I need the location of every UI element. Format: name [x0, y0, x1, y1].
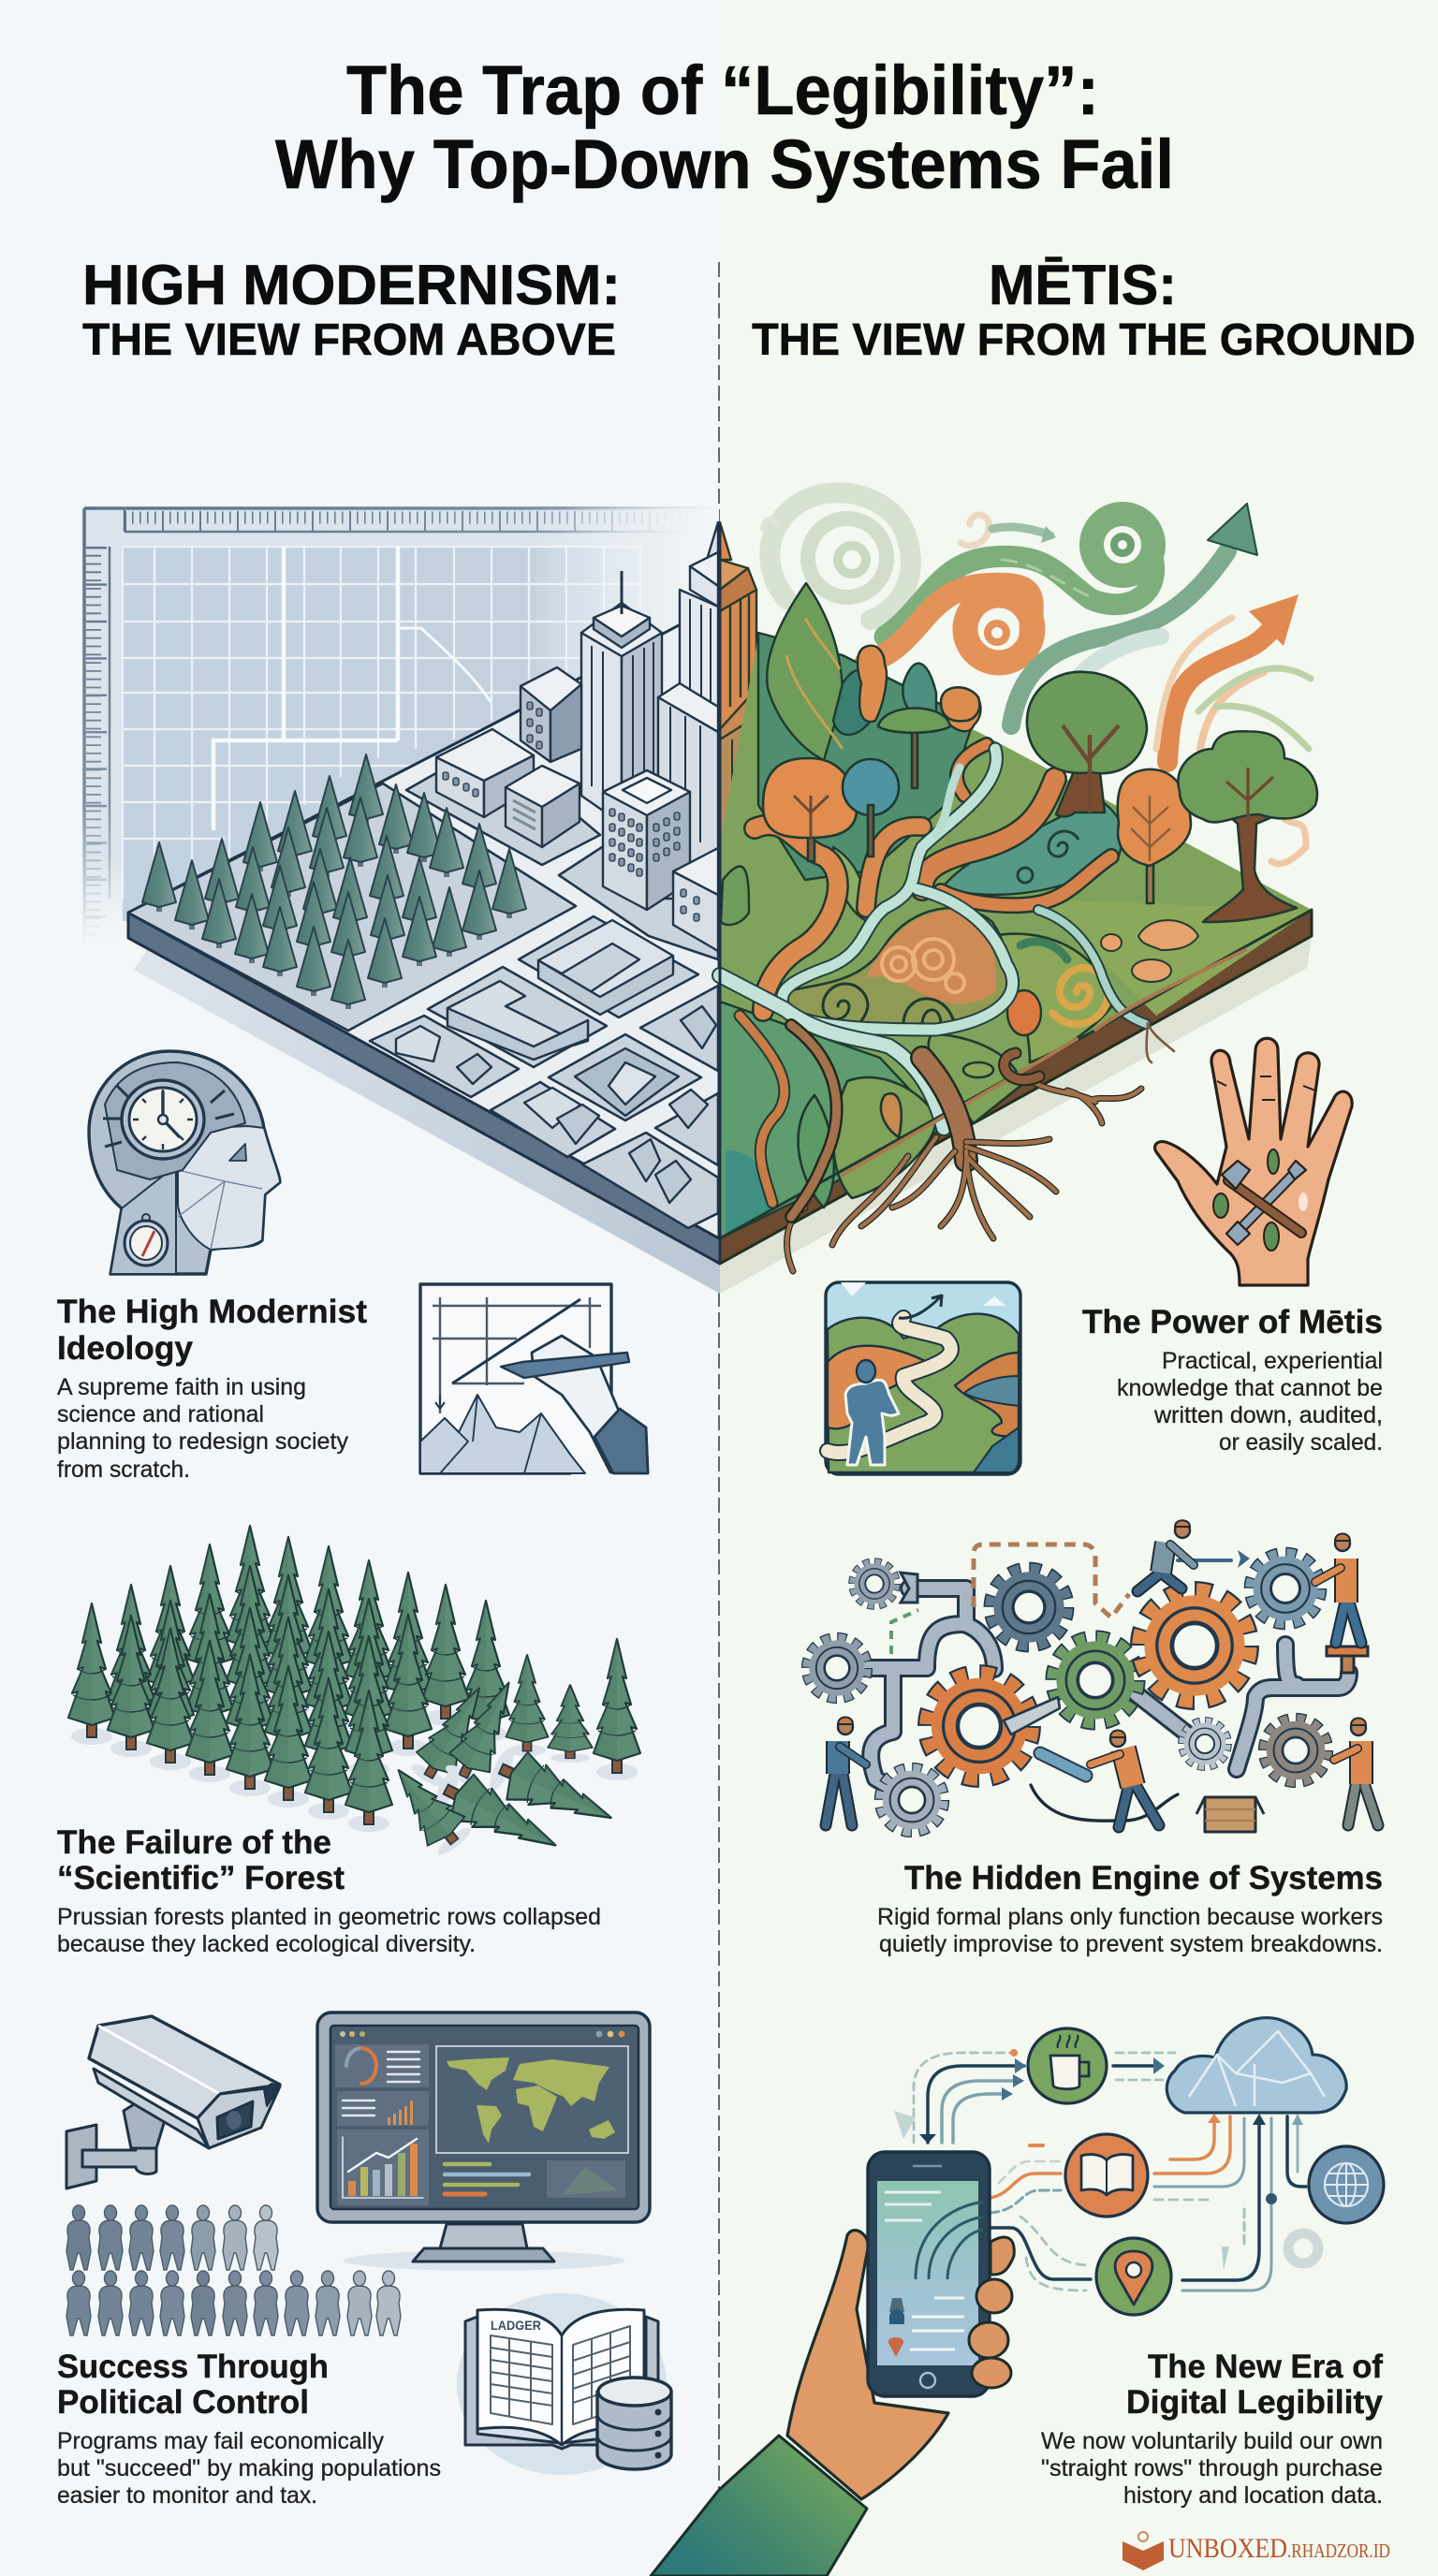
text block: the power of metis: or easily scaled. — [1219, 1429, 1383, 1456]
icon: cloud network — [1167, 2018, 1346, 2113]
office block with windows — [521, 667, 581, 762]
wrench shaft — [1004, 1697, 1060, 1734]
rivers — [720, 749, 1146, 1128]
fingers — [969, 2237, 1014, 2388]
icon: monitoring dashboard screen — [317, 2012, 650, 2271]
orange earth paths — [755, 744, 1111, 1011]
text block: the new era of digital legibility — [1041, 2349, 1384, 2509]
skyscraper left half — [658, 522, 718, 899]
text block: the hidden engine of systems: The Hidden Engine of Systems — [904, 1860, 1383, 1896]
workers — [826, 1543, 1378, 1827]
world map — [447, 2057, 615, 2144]
crate — [1196, 1797, 1264, 1832]
decorative pebbles — [1101, 920, 1198, 982]
icon: winding path landscape card — [826, 1282, 1020, 1474]
green patches — [798, 934, 1114, 1208]
logo: unboxed.rhadzor.id: .RHADZOR.ID — [1287, 2539, 1390, 2562]
text block: success through political control: but "succeed" by making populations — [57, 2455, 441, 2481]
planned conifer forest — [142, 754, 526, 1009]
text block: the hidden engine of systems: Rigid formal plans only function because workers — [877, 1904, 1383, 1930]
heading: high modernism — [82, 254, 621, 365]
low wide building — [436, 729, 534, 817]
tall tower — [581, 571, 662, 824]
illustration: collapsing scientific forest — [68, 1526, 640, 1868]
text block: the high modernist ideology: The High Modernist — [57, 1294, 367, 1330]
blueprint paper behind the city — [84, 508, 719, 945]
arm sleeve — [651, 2436, 867, 2576]
icon: ledger and database: LADGER — [491, 2318, 541, 2333]
trees — [763, 672, 1317, 922]
text block: success through political control — [57, 2349, 441, 2509]
text block: the high modernist ideology — [57, 1294, 367, 1483]
text block: the new era of digital legibility: The New Era of — [1148, 2349, 1383, 2385]
lower teal meadow — [720, 1002, 946, 1238]
back hill and big leaf — [721, 583, 981, 925]
text block: the hidden engine of systems: quietly improvise to prevent system breakdowns. — [879, 1931, 1383, 1957]
isometric platform: shadow and edge — [128, 910, 1312, 1294]
cube building — [506, 766, 580, 847]
text block: failure of the scientific forest: “Scientific” Forest — [57, 1860, 345, 1896]
text block: the power of metis: written down, audited, — [1153, 1402, 1383, 1428]
icon: hand drafting over mountains — [420, 1284, 648, 1473]
text block: the power of metis: knowledge that cannot be — [1117, 1375, 1383, 1401]
text block: the high modernist ideology: planning to redesign society — [57, 1428, 348, 1455]
heading: metis: THE VIEW FROM THE GROUND — [752, 315, 1416, 365]
orange half of skyscraper — [720, 522, 780, 842]
heading: high modernism: THE VIEW FROM ABOVE — [82, 315, 616, 365]
title — [275, 51, 1174, 203]
text block: the new era of digital legibility: Digital Legibility — [1126, 2384, 1384, 2421]
icon: head with clock and compass — [89, 1051, 280, 1274]
icon: ledger and database — [457, 2293, 671, 2475]
icon: pale settings gear — [1288, 2233, 1318, 2263]
text block: the new era of digital legibility: "straight rows" through purchase — [1041, 2455, 1383, 2481]
platform left: planned city surface — [128, 604, 719, 1238]
heading: metis — [752, 254, 1416, 365]
text block: failure of the scientific forest: Prussian forests planted in geometric rows collapsed — [57, 1904, 601, 1930]
icon: coffee cup circle — [1028, 2028, 1107, 2103]
text block: the high modernist ideology: A supreme faith in using — [57, 1374, 306, 1400]
icon: open palm with tools and leaves — [1155, 1038, 1352, 1285]
text block: the high modernist ideology: science and rational — [57, 1401, 264, 1427]
data flow lines and arrows — [914, 2053, 1306, 2291]
icon: location pin circle — [1096, 2238, 1171, 2315]
pipes — [837, 1544, 1349, 1821]
illustration: hand holding smartphone — [651, 2152, 1014, 2576]
text block: the power of metis: Practical, experiential — [1162, 1348, 1383, 1374]
roots and crust — [720, 910, 1312, 1238]
text block: failure of the scientific forest: because they lacked ecological diversity. — [57, 1931, 476, 1957]
text block: success through political control: Success Through — [57, 2349, 329, 2385]
logo: unboxed.rhadzor.id — [1123, 2532, 1390, 2570]
text block: the high modernist ideology: Ideology — [57, 1330, 194, 1367]
city buildings — [396, 522, 780, 1203]
block buildings — [396, 920, 716, 1203]
text block: success through political control: Political Control — [57, 2384, 309, 2421]
text block: the high modernist ideology: from scratch. — [57, 1456, 190, 1483]
text block: the hidden engine of systems — [877, 1860, 1383, 1957]
title: The Trap of “Legibility”: — [346, 51, 1099, 129]
phone — [868, 2152, 990, 2396]
icon: globe circle — [1309, 2146, 1384, 2223]
text block: the new era of digital legibility: We now voluntarily build our own — [1041, 2428, 1383, 2454]
icon: book circle — [1065, 2134, 1148, 2217]
orange hill with spirals — [782, 908, 1108, 1035]
title: Why Top-Down Systems Fail — [275, 125, 1174, 203]
text block: success through political control: Programs may fail economically — [57, 2428, 384, 2454]
logo: unboxed.rhadzor.id: UNBOXED — [1168, 2533, 1287, 2564]
heading: high modernism: HIGH MODERNISM: — [82, 254, 621, 316]
hand — [787, 2231, 948, 2499]
icon: monitored population rows — [66, 2205, 401, 2335]
text block: failure of the scientific forest: The Failure of the — [57, 1824, 331, 1861]
text block: the power of metis: The Power of Mētis — [1082, 1304, 1383, 1340]
windowed apartment block — [603, 770, 690, 910]
text block: failure of the scientific forest — [57, 1824, 601, 1957]
text block: success through political control: easier to monitor and tax. — [57, 2482, 317, 2509]
text block: the new era of digital legibility: history and location data. — [1123, 2482, 1383, 2509]
heading: metis: MĒTIS: — [989, 254, 1177, 316]
small corner building — [673, 848, 718, 951]
platform — [1327, 1647, 1368, 1673]
text block: the power of metis — [1082, 1304, 1383, 1456]
platform right: living landscape — [720, 524, 1317, 1271]
icon: surveillance camera — [66, 2016, 280, 2188]
illustration: gears, pipes and improvising workers — [806, 1520, 1378, 1832]
pale and green swirls above the landscape — [763, 492, 1311, 864]
